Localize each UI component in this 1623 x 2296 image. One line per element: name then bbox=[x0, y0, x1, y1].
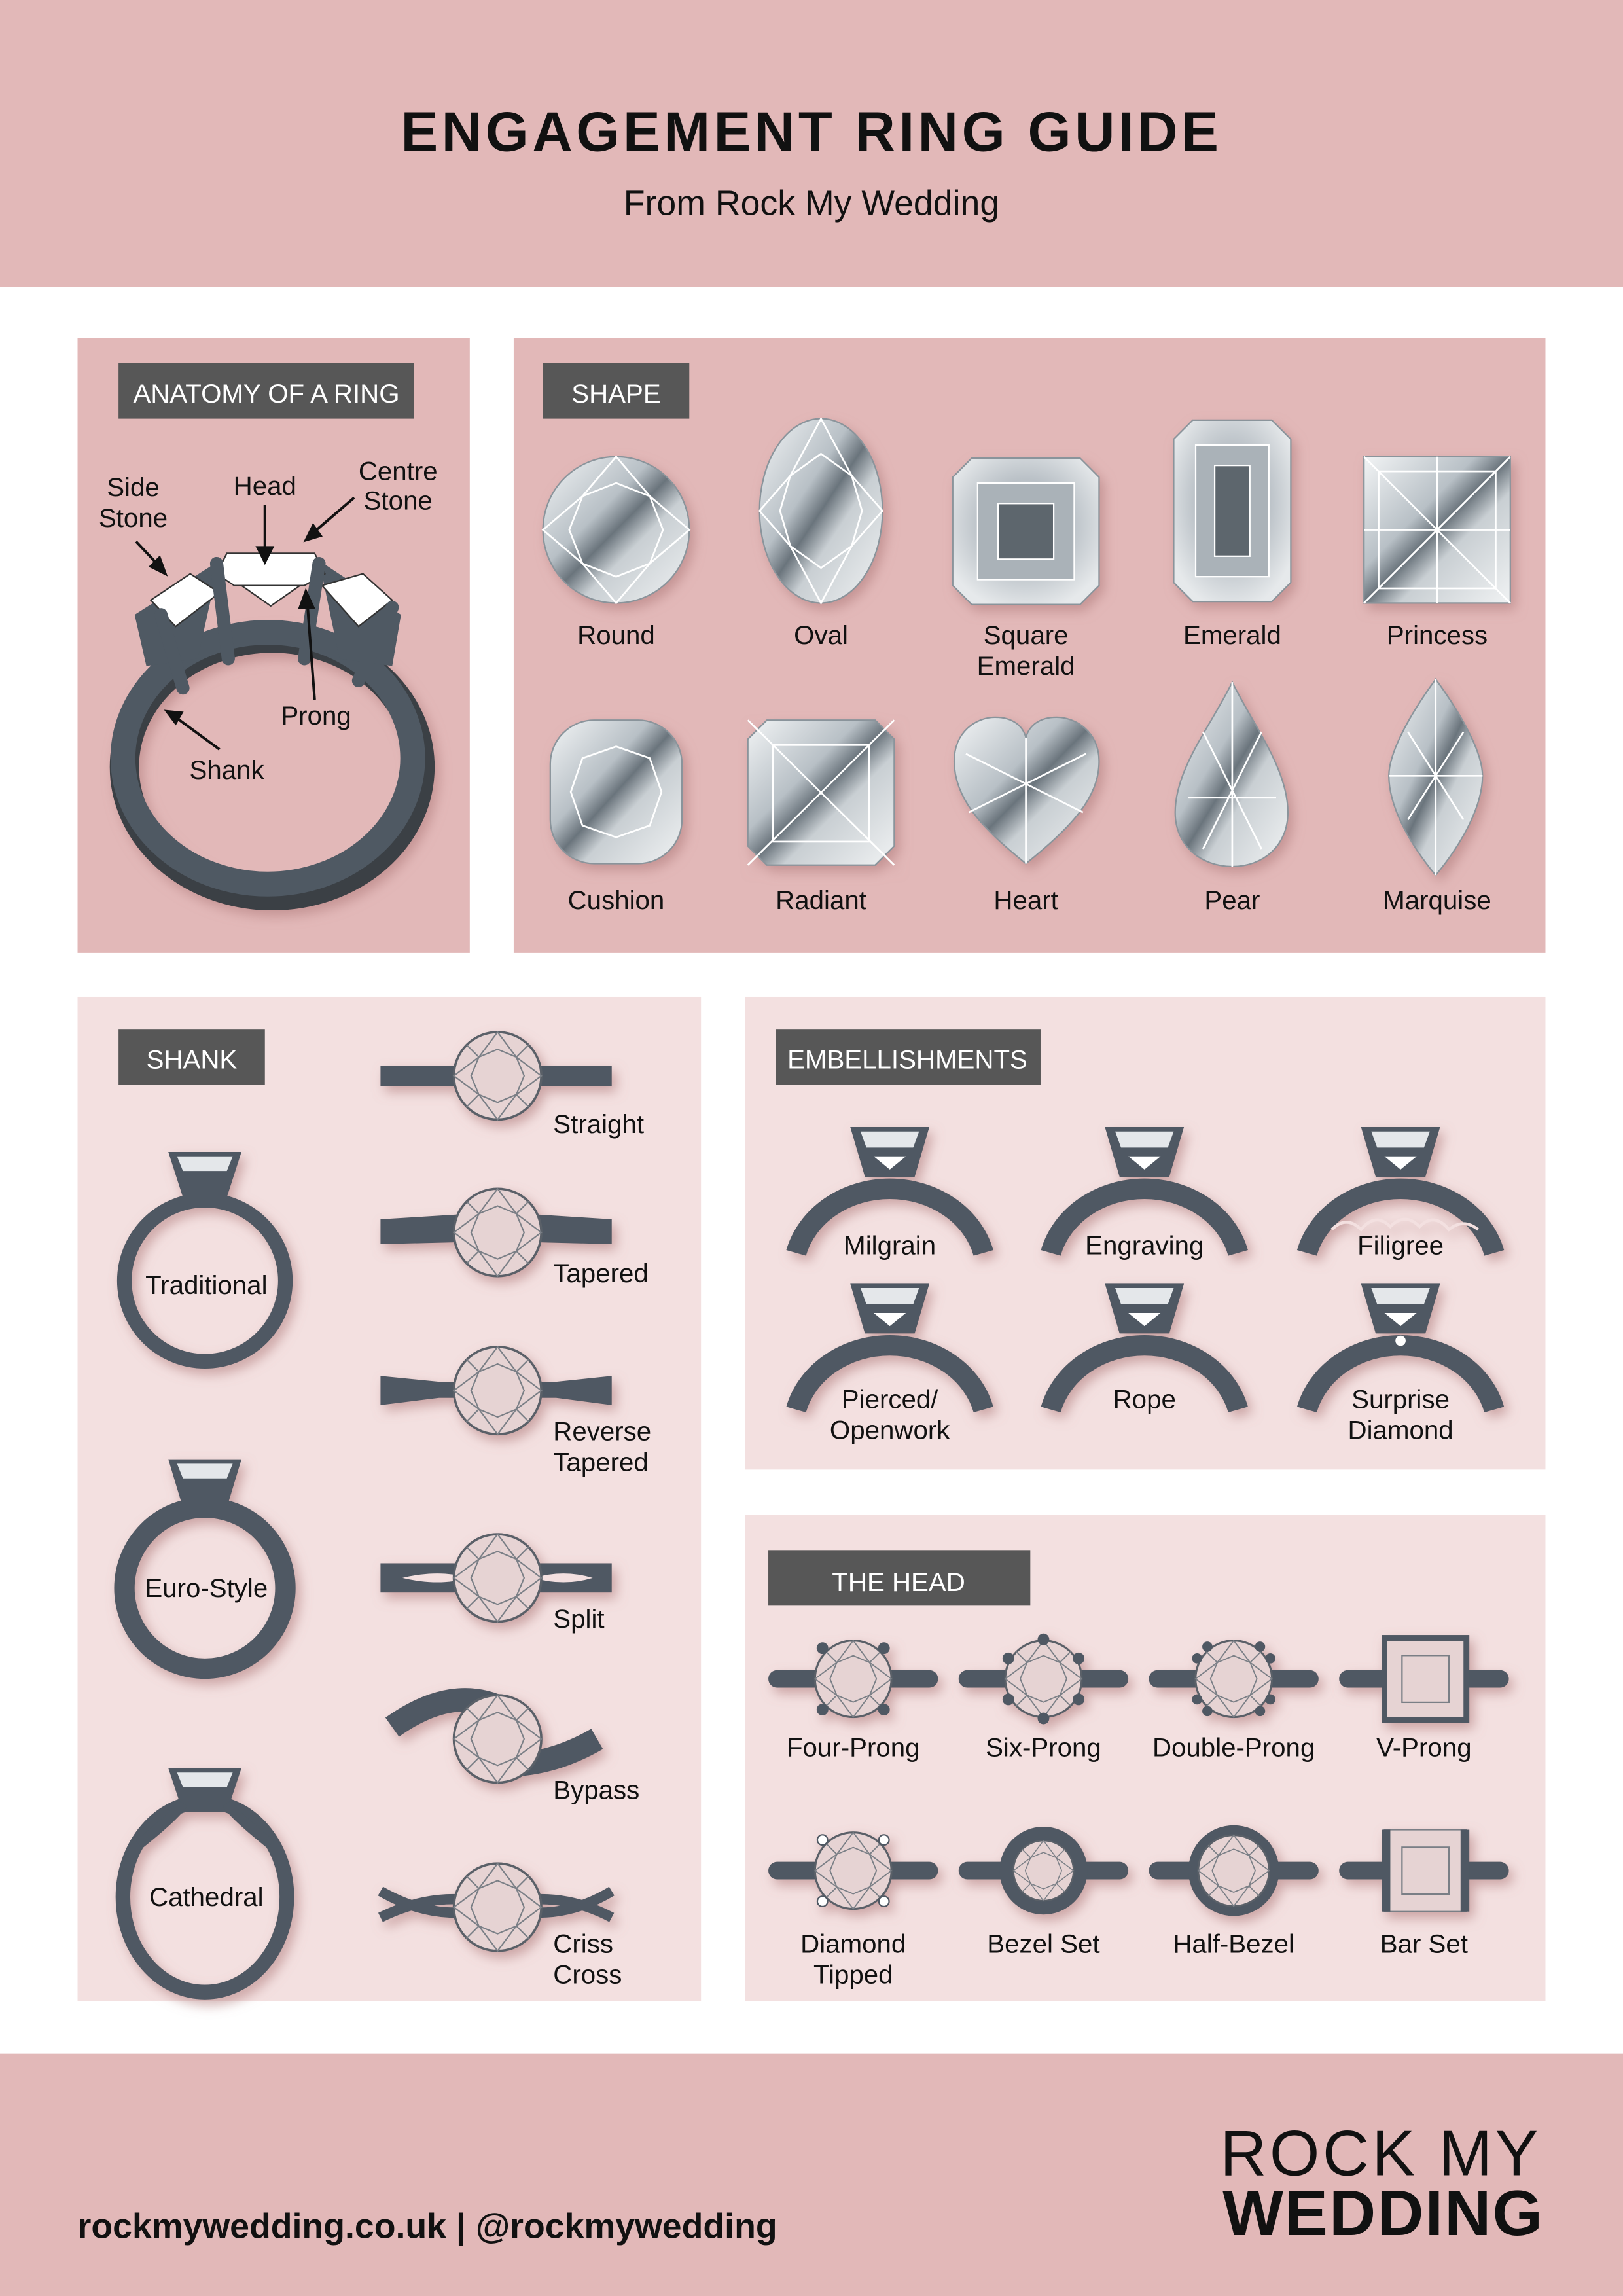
head: diamond tipped bbox=[768, 1833, 938, 1909]
anatomy labels and arrows: Stone bbox=[364, 486, 433, 515]
ring: traditional bbox=[124, 1152, 285, 1361]
gem: heart bbox=[954, 717, 1099, 863]
shape labels: Emerald bbox=[1183, 620, 1281, 650]
head: bar set bbox=[1339, 1829, 1509, 1912]
shape labels: Radiant bbox=[776, 886, 866, 915]
head labels: Half-Bezel bbox=[1173, 1929, 1294, 1958]
panel: embellishments bbox=[745, 997, 1545, 1469]
anatomy labels and arrows: Shank bbox=[190, 755, 265, 785]
embellishment labels: Milgrain bbox=[844, 1231, 936, 1261]
panel: anatomy of a ring bbox=[78, 338, 470, 953]
subtitle: From Rock My Wedding bbox=[624, 184, 999, 223]
title: ENGAGEMENT RING GUIDE bbox=[401, 101, 1222, 163]
embellishment labels: Surprise bbox=[1351, 1384, 1450, 1414]
head: v-prong bbox=[1339, 1638, 1509, 1720]
gem: oval bbox=[760, 419, 882, 603]
shape labels: Heart bbox=[993, 886, 1058, 915]
shape labels: Pear bbox=[1204, 886, 1260, 915]
ring: cathedral bbox=[123, 1768, 287, 1992]
shank: criss cross bbox=[380, 1863, 612, 1951]
shank side labels: Straight bbox=[553, 1109, 644, 1139]
shank: split bbox=[380, 1534, 612, 1622]
head labels: Diamond bbox=[800, 1929, 906, 1958]
ring: pierced openwork bbox=[796, 1283, 984, 1410]
shank side labels: Split bbox=[553, 1604, 605, 1634]
anatomy labels and arrows: Prong bbox=[281, 701, 351, 730]
label: anatomy: ANATOMY OF A RING bbox=[133, 379, 400, 408]
ring: filigree bbox=[1307, 1127, 1494, 1253]
ring: euro-style bbox=[124, 1460, 285, 1668]
shank: straight bbox=[380, 1032, 612, 1120]
embellishment labels: Filigree bbox=[1357, 1231, 1444, 1261]
shank side labels: Criss bbox=[553, 1929, 613, 1958]
label: the head bbox=[768, 1550, 1030, 1605]
head: four-prong bbox=[768, 1641, 938, 1717]
shank side labels: Cross bbox=[553, 1960, 622, 1989]
gem: radiant bbox=[748, 720, 894, 865]
gem: cushion bbox=[550, 720, 682, 863]
gem: pear bbox=[1175, 682, 1288, 867]
shape labels: Marquise bbox=[1383, 886, 1491, 915]
panel: shank bbox=[78, 997, 701, 2001]
shank side labels bbox=[553, 1109, 651, 1989]
shank ring labels bbox=[145, 1270, 268, 1912]
head: six-prong bbox=[959, 1634, 1128, 1724]
shape labels: Cushion bbox=[568, 886, 664, 915]
head labels bbox=[787, 1733, 1472, 1989]
logo bbox=[1220, 2117, 1544, 2249]
head labels: Tipped bbox=[813, 1960, 893, 1989]
head: double-prong bbox=[1149, 1641, 1319, 1717]
head labels: V-Prong bbox=[1376, 1733, 1472, 1763]
shank ring labels: Traditional bbox=[145, 1270, 268, 1300]
gem: marquise bbox=[1389, 679, 1482, 875]
anatomy labels and arrows: Head bbox=[234, 471, 296, 501]
label: shape bbox=[543, 363, 689, 419]
anatomy ring illustration bbox=[123, 553, 420, 896]
gem: round bbox=[543, 457, 689, 603]
shape labels: Oval bbox=[794, 620, 848, 650]
header bbox=[0, 0, 1623, 287]
footer website: rockmywedding.co.uk | @rockmywedding bbox=[78, 2206, 777, 2246]
shape labels bbox=[568, 620, 1491, 915]
head labels: Four-Prong bbox=[787, 1733, 920, 1763]
head: bezel set bbox=[959, 1827, 1128, 1914]
shank side labels: Bypass bbox=[553, 1776, 639, 1805]
label: shank bbox=[118, 1029, 265, 1085]
footer bbox=[0, 2054, 1623, 2296]
anatomy labels and arrows: Centre bbox=[359, 457, 438, 486]
label: the head: THE HEAD bbox=[832, 1568, 965, 1597]
shape labels: Princess bbox=[1387, 620, 1488, 650]
embellishment labels: Diamond bbox=[1348, 1415, 1454, 1444]
panel: the head bbox=[745, 1515, 1545, 2001]
panel: shape bbox=[514, 338, 1545, 953]
head labels: Six-Prong bbox=[986, 1733, 1101, 1763]
head: half-bezel bbox=[1149, 1825, 1319, 1916]
shank side labels: Reverse bbox=[553, 1417, 651, 1446]
shape labels: Square bbox=[984, 620, 1069, 650]
shank: reverse tapered bbox=[380, 1347, 612, 1434]
embellishment labels: Rope bbox=[1113, 1384, 1176, 1414]
label: shank: SHANK bbox=[147, 1045, 237, 1075]
label: anatomy bbox=[118, 363, 414, 419]
ring: surprise diamond bbox=[1307, 1283, 1494, 1410]
shank: bypass bbox=[392, 1695, 597, 1783]
ring: rope bbox=[1051, 1283, 1238, 1410]
label: embellishments bbox=[776, 1029, 1041, 1085]
embellishment labels: Pierced/ bbox=[842, 1384, 938, 1414]
shank side labels: Tapered bbox=[553, 1448, 649, 1477]
embellishment labels: Engraving bbox=[1085, 1231, 1204, 1261]
label: shape: SHAPE bbox=[571, 379, 661, 408]
gem: emerald bbox=[1173, 420, 1291, 601]
label: embellishments: EMBELLISHMENTS bbox=[787, 1045, 1027, 1075]
anatomy labels and arrows bbox=[99, 457, 438, 785]
shank ring labels: Euro-Style bbox=[145, 1573, 268, 1603]
shank: tapered bbox=[380, 1189, 612, 1276]
ring: milgrain bbox=[796, 1127, 984, 1253]
ring: engraving bbox=[1051, 1127, 1238, 1253]
gem: princess bbox=[1364, 457, 1510, 603]
logo: WEDDING bbox=[1222, 2177, 1544, 2249]
shape labels: Round bbox=[577, 620, 655, 650]
shank ring labels: Cathedral bbox=[149, 1882, 264, 1912]
logo: ROCK MY bbox=[1220, 2117, 1541, 2189]
anatomy labels and arrows: Stone bbox=[99, 503, 168, 533]
embellishment labels: Openwork bbox=[830, 1415, 950, 1444]
head labels: Bar Set bbox=[1380, 1929, 1468, 1958]
anatomy labels and arrows: Side bbox=[107, 473, 160, 502]
head labels: Double-Prong bbox=[1152, 1733, 1315, 1763]
shank side labels: Tapered bbox=[553, 1259, 649, 1288]
embellishment labels bbox=[830, 1231, 1454, 1444]
head labels: Bezel Set bbox=[987, 1929, 1100, 1958]
gem: square emerald bbox=[953, 458, 1099, 605]
shape labels: Emerald bbox=[977, 651, 1075, 681]
